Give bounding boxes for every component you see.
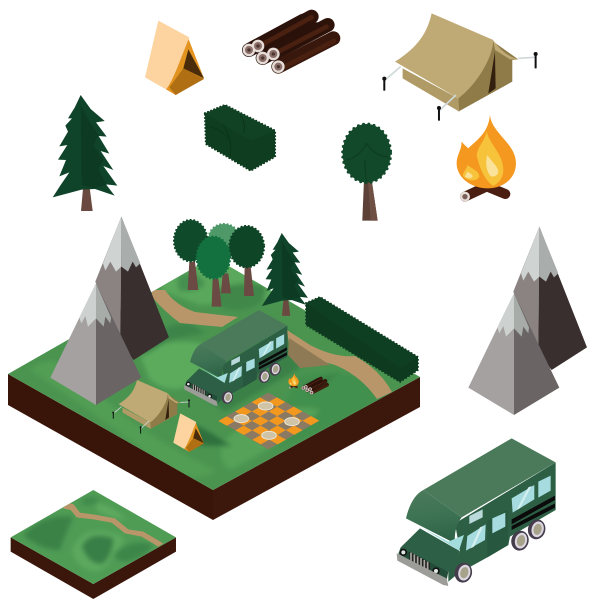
panel: main isometric campsite diorama [0,217,430,520]
grass surface [8,266,420,490]
icon: pine tree [53,95,117,211]
icon: large canvas tent [382,13,538,121]
icon: campfire [457,115,516,202]
campfire [288,373,299,389]
soil sides of main block [8,374,420,520]
log pile [302,379,327,394]
icon: hedge block [205,105,275,171]
tile soil sides [11,537,176,599]
picnic blanket [218,393,319,449]
icon: small A-frame tent [145,21,204,95]
pine tree [262,233,308,316]
mountains [50,217,169,405]
icon: pair of snowy mountains [468,227,587,415]
tile grass surface [10,488,177,585]
icon: large RV camper [397,438,556,586]
icon: round tree [343,124,391,221]
icon: stacked logs [243,17,334,73]
small tent [173,413,204,452]
trees group [174,220,264,307]
RV camper [184,310,287,406]
hedge row [306,297,418,382]
panel: small terrain tile [10,488,177,599]
large tent [112,380,190,434]
